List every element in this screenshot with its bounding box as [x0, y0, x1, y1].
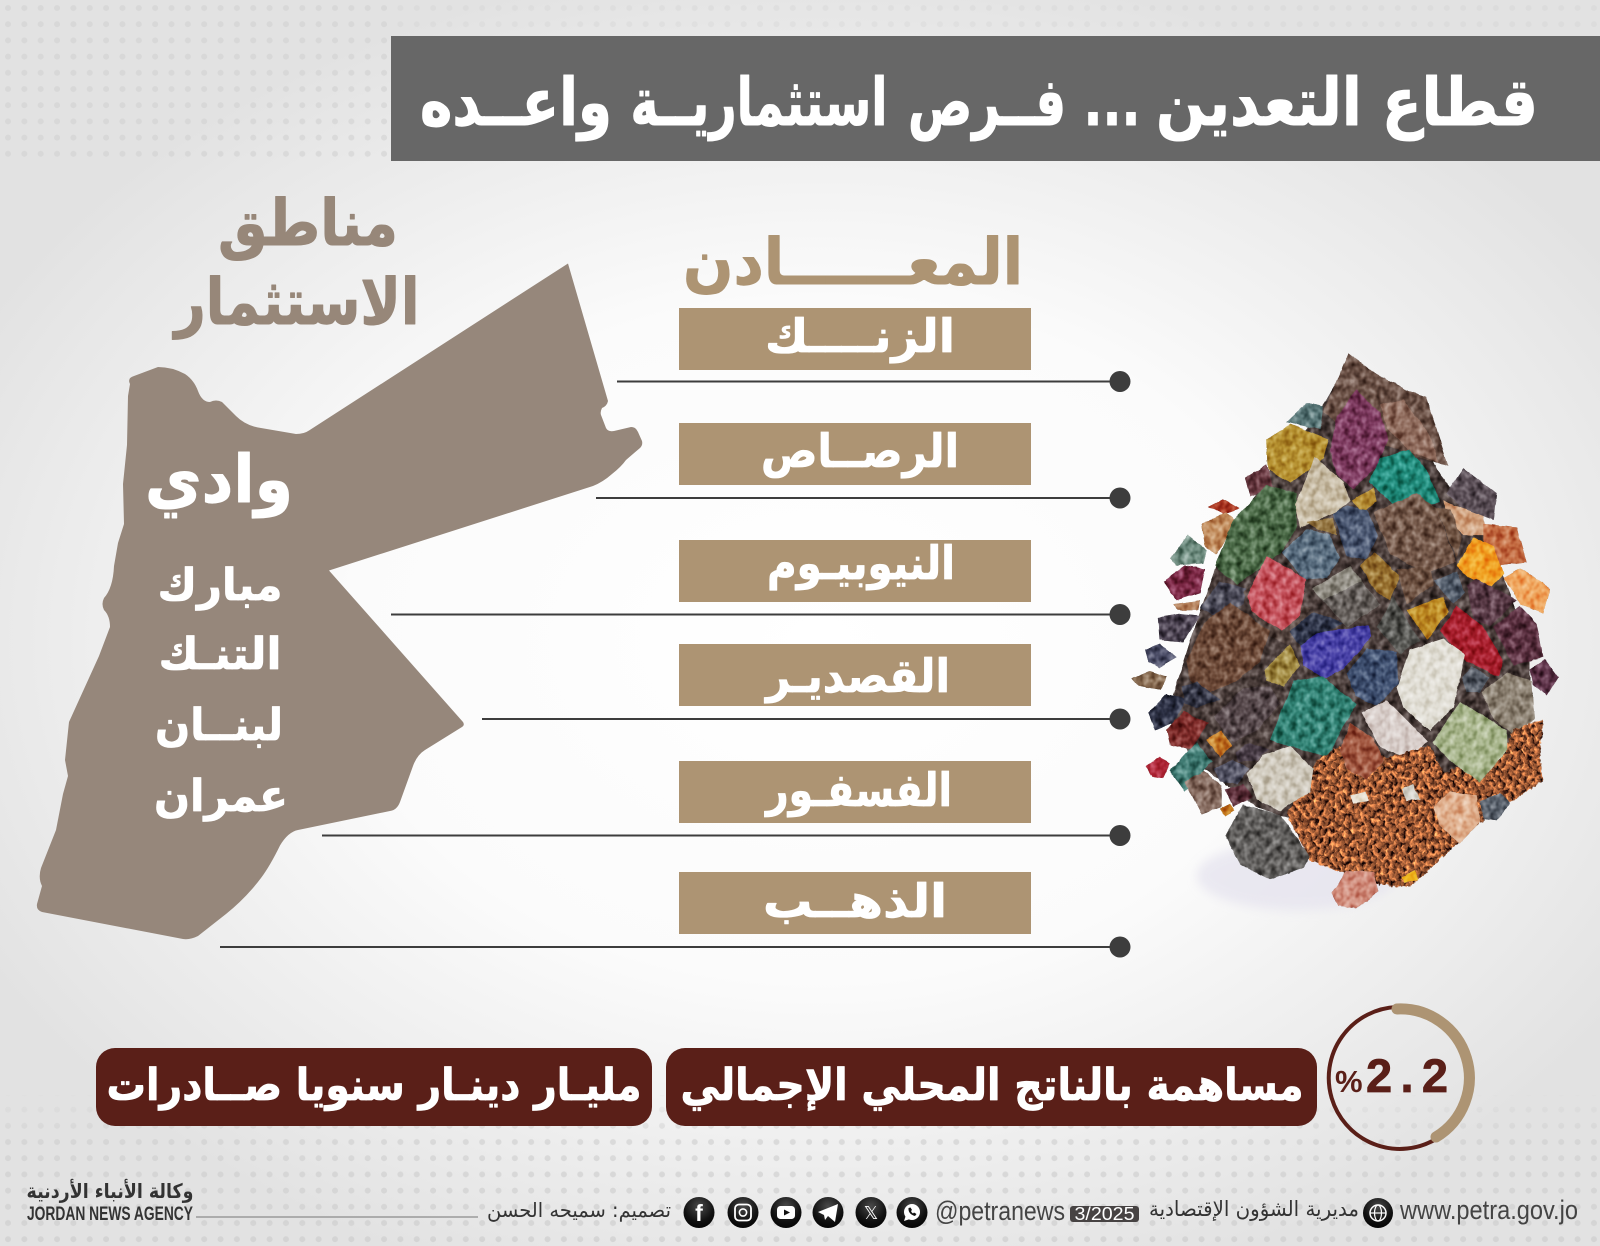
- title banner: [391, 36, 1600, 161]
- icon: x: [856, 1197, 886, 1228]
- department name: مديرية الشؤون الإقتصادية: [1149, 1197, 1359, 1221]
- callout: exports: مليـار دينـار سنويا صــادرات: [106, 1060, 642, 1111]
- mineral: lead: [679, 423, 1031, 485]
- mineral: gold: [679, 872, 1031, 934]
- title: واعــده: [420, 64, 612, 142]
- place: Omran: عمران: [154, 771, 288, 822]
- title: قطاع التعدين: [1156, 64, 1538, 141]
- social handle: @petranews: [935, 1196, 1065, 1226]
- icon: facebook: f: [695, 1200, 703, 1226]
- title: فــرص: [908, 64, 1066, 141]
- mineral: lead: الرصــاص: [761, 424, 959, 478]
- callout: exports: [96, 1048, 652, 1126]
- title: [420, 64, 1538, 142]
- agency logo: [26, 1178, 194, 1225]
- mineral: zinc: الزنــــك: [765, 309, 955, 363]
- icon: youtube: [770, 1197, 802, 1228]
- place: Mubarak: مبارك: [158, 560, 282, 611]
- date badge: 3/2025: [1074, 1204, 1134, 1224]
- place: Lubnan: لبنــان: [155, 700, 283, 751]
- map of Jordan with investment areas: [37, 264, 642, 939]
- designer credit: تصميم: سميحه الحسن: [487, 1198, 671, 1222]
- heading: investment areas: الاستثمار: [172, 266, 420, 340]
- place: Al-Tanak: التنـك: [158, 629, 282, 680]
- connector lines and dots: [220, 371, 1130, 958]
- mineral: niobium: [679, 536, 1031, 602]
- icon: instagram: [728, 1197, 758, 1228]
- callout: GDP contribution: [666, 1048, 1317, 1126]
- mineral: phosphate: الفسفـور: [764, 763, 952, 817]
- mineral list: [679, 308, 1031, 934]
- heading: minerals: المعــــــادن: [683, 226, 1023, 300]
- mineral: tin: القصديـر: [764, 649, 950, 703]
- heading: investment areas: [172, 187, 420, 340]
- footer rule: [196, 1216, 478, 1218]
- icon: facebook: [684, 1197, 714, 1228]
- gauge: 2.2%: 2.2: [1366, 1049, 1448, 1102]
- agency logo: وكالة الأنباء الأردنية: [26, 1178, 194, 1203]
- mineral: zinc: [679, 308, 1031, 370]
- illustration: pile of mineral rocks: [1132, 353, 1558, 910]
- heading: investment areas: مناطق: [218, 187, 398, 261]
- social icons: [684, 1197, 928, 1228]
- gauge: 2.2%: %: [1335, 1064, 1363, 1099]
- website: www.petra.gov.jo: [1399, 1195, 1578, 1225]
- mineral: tin: [679, 644, 1031, 706]
- title: ...: [1084, 64, 1140, 141]
- callout: GDP contribution: مساهمة بالناتج المحلي الإجمالي: [680, 1060, 1304, 1111]
- agency logo: JORDAN NEWS AGENCY: [27, 1204, 193, 1225]
- title: استثماريــة: [630, 64, 888, 141]
- gauge: 2.2%: [1329, 1007, 1469, 1149]
- icon: x: 𝕏: [864, 1203, 878, 1223]
- icon: whatsapp: [896, 1197, 928, 1228]
- icon: globe: [1363, 1198, 1393, 1228]
- mineral: niobium: النيوبيـوم: [767, 536, 955, 590]
- icon: telegram: [812, 1197, 844, 1228]
- wadi label: وادي: [145, 441, 293, 519]
- mineral: phosphate: [679, 761, 1031, 823]
- mineral: gold: الذهــب: [763, 874, 947, 928]
